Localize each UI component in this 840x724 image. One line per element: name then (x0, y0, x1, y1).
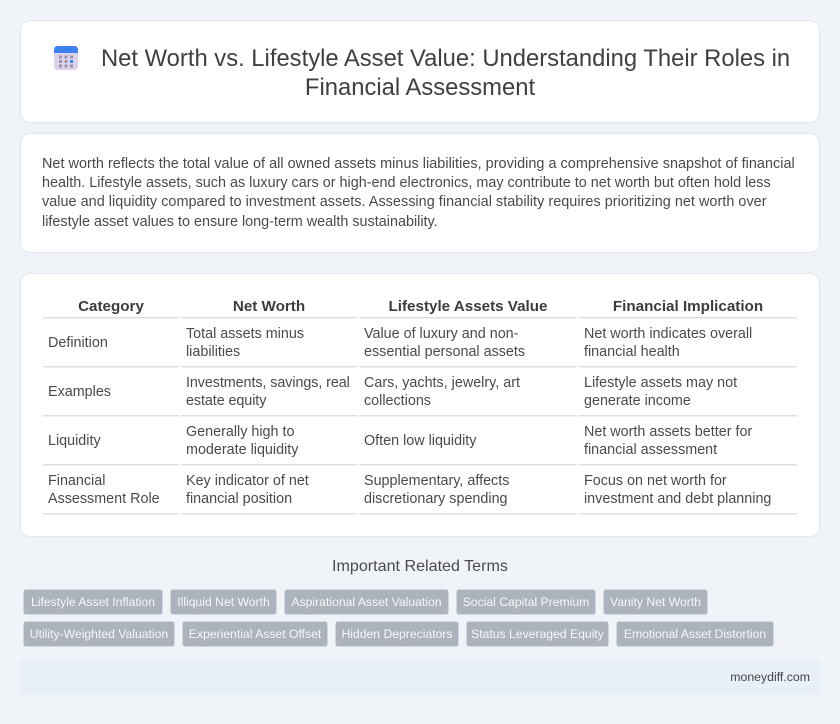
table header row: Financial Implication (613, 298, 763, 315)
row: Definition: Total assets minus (186, 326, 304, 342)
panel: comparison table card (20, 273, 820, 537)
title: Net Worth vs. Lifestyle Asset Value: Understanding Their Roles in (101, 45, 790, 72)
row: Financial Assessment Role: Assessment Role (48, 491, 160, 507)
row: Examples (43, 375, 797, 417)
text block: summary: value and liquidity compared to investment assets. Assessing financial stability requires prioritizing net worth over (42, 194, 767, 210)
related terms tags: Aspirational Asset Valuation (291, 595, 442, 609)
row: Financial Assessment Role: financial position (186, 491, 292, 507)
row: Liquidity: Liquidity (48, 433, 101, 449)
row: Financial Assessment Role: Focus on net worth for (584, 473, 727, 489)
row: Examples: generate income (584, 393, 691, 409)
row: Liquidity: Net worth assets better for (584, 424, 752, 440)
row: Definition: essential personal assets (364, 344, 525, 360)
row: Examples: Cars, yachts, jewelry, art (364, 375, 520, 391)
table header row: Lifestyle Assets Value (388, 298, 548, 315)
row: Examples: estate equity (186, 393, 266, 409)
row: Financial Assessment Role (43, 473, 797, 515)
table header row (43, 298, 797, 319)
panel: summary card (20, 133, 820, 253)
row: Definition: Net worth indicates overall (584, 326, 752, 342)
row: Liquidity: financial assessment (584, 442, 717, 458)
related terms tags: Experiential Asset Offset (189, 627, 321, 641)
row: Financial Assessment Role: Key indicator of net (186, 473, 309, 489)
footer: site name: moneydiff.com (730, 670, 810, 684)
related terms tags (23, 589, 774, 647)
row: Liquidity (43, 424, 797, 466)
row: Examples: Lifestyle assets may not (584, 375, 737, 391)
text block: summary (42, 156, 795, 230)
row: Financial Assessment Role: Supplementary, affects (364, 473, 509, 489)
row: Definition: financial health (584, 344, 680, 360)
comparison table (43, 298, 797, 515)
row: Examples: Investments, savings, real (186, 375, 350, 391)
row: Liquidity: Often low liquidity (364, 433, 476, 449)
row: Examples: Examples (48, 384, 111, 400)
heading: Important Related Terms: Important Related Terms (332, 557, 508, 575)
related terms tags: Emotional Asset Distortion (624, 627, 766, 641)
row: Liquidity: Generally high to (186, 424, 294, 440)
row: Financial Assessment Role: investment and debt planning (584, 491, 771, 507)
panel: header card (20, 20, 820, 123)
text block: summary: health. Lifestyle assets, such as luxury cars or high-end electronics, may contribute to net worth but often hold less (42, 175, 771, 191)
related terms tags: Utility-Weighted Valuation (30, 627, 168, 641)
row: Definition: Value of luxury and non- (364, 326, 518, 342)
row: Definition: Definition (48, 335, 108, 351)
related terms tags: Social Capital Premium (463, 595, 589, 609)
footer bar (20, 660, 820, 694)
related terms tags: Hidden Depreciators (341, 627, 453, 641)
related terms tags: Illiquid Net Worth (177, 595, 270, 609)
table header row: Category (78, 298, 144, 315)
related terms tags: Status Leveraged Equity (471, 627, 604, 641)
text block: summary: Net worth reflects the total value of all owned assets minus liabilities, providing a comprehensive snapshot of financial (42, 156, 795, 172)
related terms tags: Lifestyle Asset Inflation (31, 595, 155, 609)
title: Financial Assessment (305, 74, 535, 101)
row: Liquidity: moderate liquidity (186, 442, 298, 458)
title (101, 45, 790, 101)
icon: calendar (54, 46, 78, 70)
related terms tags: Vanity Net Worth (610, 595, 701, 609)
table header row: Net Worth (233, 298, 305, 315)
row: Financial Assessment Role: discretionary spending (364, 491, 508, 507)
row: Definition (43, 326, 797, 368)
row: Definition: liabilities (186, 344, 240, 360)
row: Financial Assessment Role: Financial (48, 473, 105, 489)
text block: summary: lifestyle asset values to ensure long-term wealth sustainability. (42, 214, 438, 230)
row: Examples: collections (364, 393, 431, 409)
